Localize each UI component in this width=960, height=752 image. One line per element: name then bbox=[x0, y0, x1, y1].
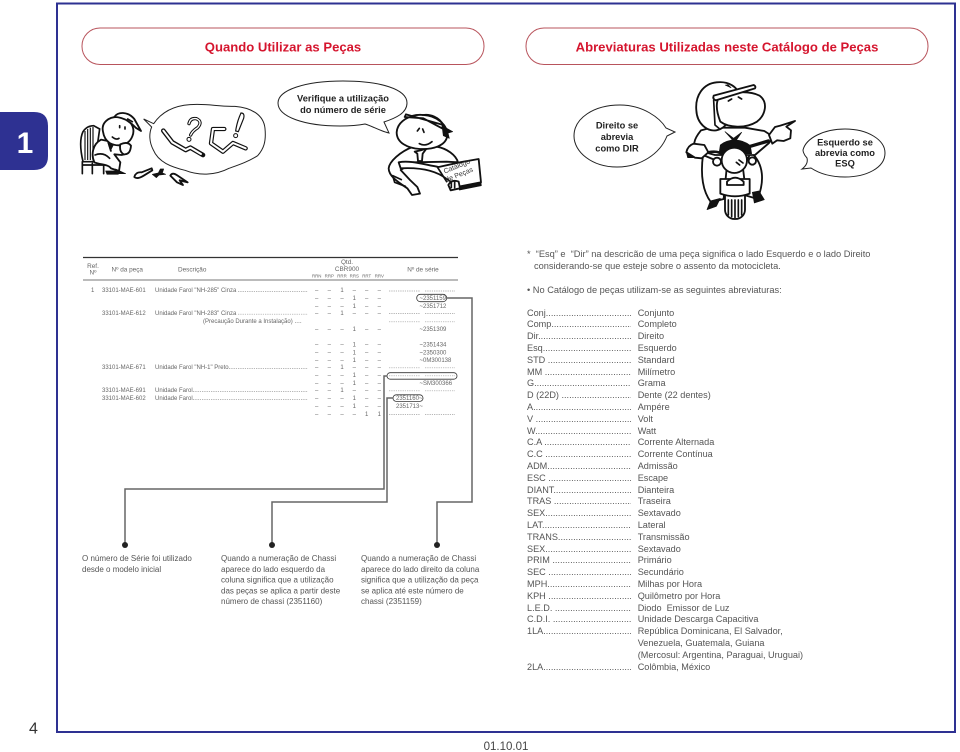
abbreviations list: Escape bbox=[638, 473, 668, 483]
speech bubble: Verifique a utilização: Verifique a utilização bbox=[297, 94, 389, 104]
abbreviations list: Admissão bbox=[638, 461, 678, 471]
quantity columns: –––1–– bbox=[315, 373, 382, 379]
callout: chassis number on the right bbox=[361, 294, 480, 606]
abbreviations list: Completo bbox=[638, 319, 677, 329]
serial numbers: ~SM300366 bbox=[420, 381, 453, 387]
table header: RRS bbox=[350, 274, 359, 278]
abbreviations list: Transmissão bbox=[638, 532, 690, 542]
cap band bbox=[405, 114, 443, 128]
boots bbox=[707, 198, 720, 210]
hand on chin bbox=[120, 143, 131, 154]
table header: Nº da peça bbox=[112, 266, 143, 274]
callout: chassis number on the right: significa que a utilização da peça bbox=[361, 576, 479, 584]
abbreviations list: Colômbia, México bbox=[638, 662, 710, 672]
quantity columns: –––1–– bbox=[315, 396, 382, 402]
section tab: 1 bbox=[0, 112, 48, 170]
abbreviations list: Milhas por Hora bbox=[638, 579, 702, 589]
serial numbers bbox=[389, 291, 455, 414]
page number: 4 bbox=[29, 720, 38, 738]
quantity columns: ––1––– bbox=[315, 388, 382, 394]
callout: chassis number on the right: chassi (2351159) bbox=[361, 597, 422, 606]
question mark bbox=[189, 119, 200, 135]
table header: Nº de série bbox=[407, 266, 439, 274]
speech bubble: Esquerdo se abrevia como ESQ: abrevia como bbox=[815, 148, 875, 158]
abbreviations list: Unidade Descarga Capacitiva bbox=[638, 614, 758, 624]
quantity columns: ––1––– bbox=[315, 288, 382, 294]
part codes and descriptions: 33101-MAE-671 bbox=[102, 365, 146, 371]
shoes bbox=[106, 171, 118, 174]
speech bubble: Verifique a utilização: do número de série bbox=[300, 105, 386, 115]
speech bubble: Esquerdo se abrevia como ESQ: ESQ bbox=[835, 158, 855, 168]
abbreviations list: Corrente Contínua bbox=[638, 449, 713, 459]
table header: CBR900 bbox=[335, 266, 360, 273]
table header: Ref. bbox=[87, 263, 99, 270]
part codes and descriptions: 33101-MAE-612 bbox=[102, 311, 146, 317]
abbreviations list: Quilômetro por Hora bbox=[638, 591, 720, 601]
speech bubble: Direito se abrevia como DIR: como DIR bbox=[595, 144, 639, 154]
head bbox=[103, 117, 133, 145]
abbreviations list: Ampére bbox=[638, 402, 670, 412]
heading: Abreviaturas Utilizadas bbox=[526, 28, 928, 64]
quantity columns: –––1–– bbox=[315, 381, 382, 387]
pointing hand bbox=[769, 121, 795, 144]
part codes and descriptions: (Precaução Durante a Instalação) bbox=[203, 319, 293, 325]
torso bbox=[694, 128, 774, 155]
serial numbers: ~2351712 bbox=[420, 304, 447, 310]
headlight bbox=[722, 148, 747, 173]
heading: Abreviaturas Utilizadas: Abreviaturas Utilizadas neste Catálogo de Peças bbox=[576, 40, 878, 54]
callout: chassis number on the left: Quando a numeração de Chassi bbox=[221, 554, 336, 563]
abbreviations list: (Mercosul: Argentina, Paraguai, Uruguai) bbox=[638, 650, 803, 660]
abbreviations list: Dente (22 dentes) bbox=[638, 390, 711, 400]
fingers bbox=[448, 181, 460, 190]
callout: serial number since initial model: desde o modelo inicial bbox=[82, 565, 161, 574]
abbreviations list: Venezuela, Guatemala, Guiana bbox=[638, 638, 765, 648]
speech bubble: Direito se abrevia como DIR: abrevia bbox=[601, 132, 634, 142]
abbreviations list: Dianteira bbox=[638, 485, 674, 495]
abbreviations list: Diodo Emissor de Luz bbox=[638, 603, 730, 613]
tie bbox=[415, 148, 427, 161]
part codes and descriptions: 33101-MAE-602 bbox=[102, 396, 146, 402]
legs bbox=[702, 155, 727, 202]
speech bubble: Esquerdo se abrevia como ESQ bbox=[802, 129, 885, 177]
part codes and descriptions: 33101-MAE-691 bbox=[102, 388, 146, 394]
callout: serial number since initial model bbox=[82, 373, 457, 574]
table header: RRP bbox=[325, 274, 334, 278]
catalogue label: Catálogo bbox=[443, 158, 471, 175]
quantity columns: –––1–– bbox=[315, 296, 382, 302]
speech bubble: Verifique a utilização bbox=[278, 81, 407, 133]
abbreviations list: Direito bbox=[638, 331, 664, 341]
table header: RRV bbox=[375, 274, 384, 278]
part codes and descriptions bbox=[91, 288, 308, 402]
thought bubble bbox=[144, 104, 265, 174]
serial numbers: ~2351159 bbox=[420, 296, 447, 302]
callout: chassis number on the left: coluna significa que a utilização bbox=[221, 576, 334, 584]
illustration: man reading parts catalogue: de Peças bbox=[445, 166, 475, 184]
quantity columns: –––1–– bbox=[315, 350, 382, 356]
illustration: man reading parts catalogue bbox=[389, 114, 481, 195]
chair bbox=[81, 126, 100, 162]
left hand and handlebar bbox=[686, 144, 708, 158]
table header: RRT bbox=[362, 274, 371, 278]
abbreviations list bbox=[527, 308, 803, 672]
callout: serial number since initial model: O número de Série foi utilizado bbox=[82, 554, 192, 563]
part codes and descriptions: Unidade Farol bbox=[155, 388, 193, 394]
abbreviations list: Sextavado bbox=[638, 544, 681, 554]
quantity columns: –––1–– bbox=[315, 343, 382, 349]
part codes and descriptions: Unidade Farol "NH-285" Cinza bbox=[155, 288, 237, 294]
abbreviations list: República Dominicana, El Salvador, bbox=[638, 626, 783, 636]
serial numbers: 2351160~ bbox=[396, 396, 423, 402]
serial numbers: ~2351434 bbox=[420, 343, 447, 349]
note: Esq and Dir meaning: • No Catálogo de peças utilizam-se as seguintes abreviaturas: bbox=[527, 285, 782, 295]
callout: chassis number on the right: aparece do lado direito da coluna bbox=[361, 565, 480, 574]
abbreviations list: Grama bbox=[638, 378, 666, 388]
exclamation mark bbox=[236, 113, 244, 132]
part codes and descriptions: 1 bbox=[91, 288, 95, 294]
abbreviations list: Lateral bbox=[638, 520, 666, 530]
abbreviations list: Milímetro bbox=[638, 367, 675, 377]
callout: chassis number on the left: das peças se aplica a partir deste bbox=[221, 586, 341, 596]
serial numbers: ~0M300138 bbox=[420, 358, 452, 364]
table header bbox=[87, 259, 439, 278]
illustration: confused mechanic with thought bubble bbox=[81, 104, 265, 185]
abbreviations list: Corrente Alternada bbox=[638, 437, 714, 447]
mirrors / side lamps bbox=[713, 158, 721, 166]
parts table bbox=[83, 258, 458, 418]
abbreviations list: Watt bbox=[638, 426, 656, 436]
body and arm bbox=[389, 147, 458, 195]
bent bar right bbox=[211, 129, 246, 152]
helmet bbox=[696, 82, 738, 130]
quantity columns bbox=[315, 288, 382, 418]
bent bar left bbox=[163, 131, 203, 155]
serial numbers: 2351713~ bbox=[396, 404, 423, 410]
section tab: 1: 1 bbox=[17, 127, 33, 160]
callout: chassis number on the right: se aplica até este número de bbox=[361, 586, 464, 596]
abbreviations list: Secundário bbox=[638, 567, 684, 577]
callout: chassis number on the left: aparece do lado esquerdo da bbox=[221, 565, 326, 574]
note: Esq and Dir meaning: considerando-se que esteje sobre o assento da motocicleta. bbox=[534, 261, 781, 271]
body bbox=[93, 140, 128, 171]
abbreviations list: Volt bbox=[638, 414, 653, 424]
helmet brim bbox=[713, 85, 755, 100]
tools bbox=[134, 168, 152, 178]
table header: RRR bbox=[337, 274, 347, 278]
table header: Nº bbox=[90, 270, 97, 276]
abbreviations list: Primário bbox=[638, 555, 672, 565]
speech bubble: Direito se abrevia como DIR: Direito se bbox=[596, 120, 638, 130]
quantity columns: –––1–– bbox=[315, 304, 382, 310]
callout: chassis number on the right: Quando a numeração de Chassi bbox=[361, 554, 476, 563]
open book bbox=[399, 159, 481, 187]
quantity columns: ––––11 bbox=[315, 412, 382, 418]
abbreviations list: Sextavado bbox=[638, 508, 681, 518]
table header: RRN bbox=[312, 274, 321, 278]
quantity columns: ––1––– bbox=[315, 365, 382, 371]
fork and fender bbox=[720, 179, 750, 196]
part codes and descriptions: 33101-MAE-601 bbox=[102, 288, 146, 294]
callout: chassis number on the left bbox=[221, 395, 423, 606]
note: Esq and Dir meaning bbox=[527, 249, 870, 295]
serial numbers: ~2350300 bbox=[420, 350, 447, 356]
quantity columns: ––1––– bbox=[315, 311, 382, 317]
speech bubble: Esquerdo se abrevia como ESQ: Esquerdo se bbox=[817, 138, 873, 148]
quantity columns: –––1–– bbox=[315, 327, 382, 333]
abbreviations list: Standard bbox=[638, 355, 675, 365]
quantity columns: –––1–– bbox=[315, 404, 382, 410]
abbreviations list: Conjunto bbox=[638, 308, 674, 318]
abbreviations list: Traseira bbox=[638, 496, 671, 506]
neck and tie bbox=[725, 132, 742, 147]
part codes and descriptions: Unidade Farol "NH-283" Cinza bbox=[155, 311, 237, 317]
part codes and descriptions: Unidade Farol "NH-1" Preto bbox=[155, 365, 229, 371]
part codes and descriptions: Unidade Farol bbox=[155, 396, 193, 402]
head bbox=[397, 115, 447, 149]
front wheel bbox=[725, 182, 745, 219]
note: Esq and Dir meaning: * “Esq” e “Dir” na descricão de uma peça significa o lado Esquerdo e o lado Direito bbox=[527, 249, 870, 259]
face bbox=[717, 92, 765, 127]
table header: Qtd. bbox=[341, 259, 353, 266]
callout: chassis number on the left: número de chassi (2351160) bbox=[221, 597, 323, 606]
heading: Quando Utilizar as Peças bbox=[82, 28, 484, 64]
speech bubble: Direito se abrevia como DIR bbox=[574, 105, 675, 167]
illustration: rider on motorcycle bbox=[686, 82, 795, 219]
heading: Quando Utilizar as Peças: Quando Utilizar as Peças bbox=[205, 40, 361, 54]
table header: Descrição bbox=[178, 266, 207, 274]
abbreviations list: Esquerdo bbox=[638, 343, 677, 353]
serial numbers: ~2351309 bbox=[420, 327, 447, 333]
cap bbox=[114, 113, 141, 131]
quantity columns: –––1–– bbox=[315, 358, 382, 364]
